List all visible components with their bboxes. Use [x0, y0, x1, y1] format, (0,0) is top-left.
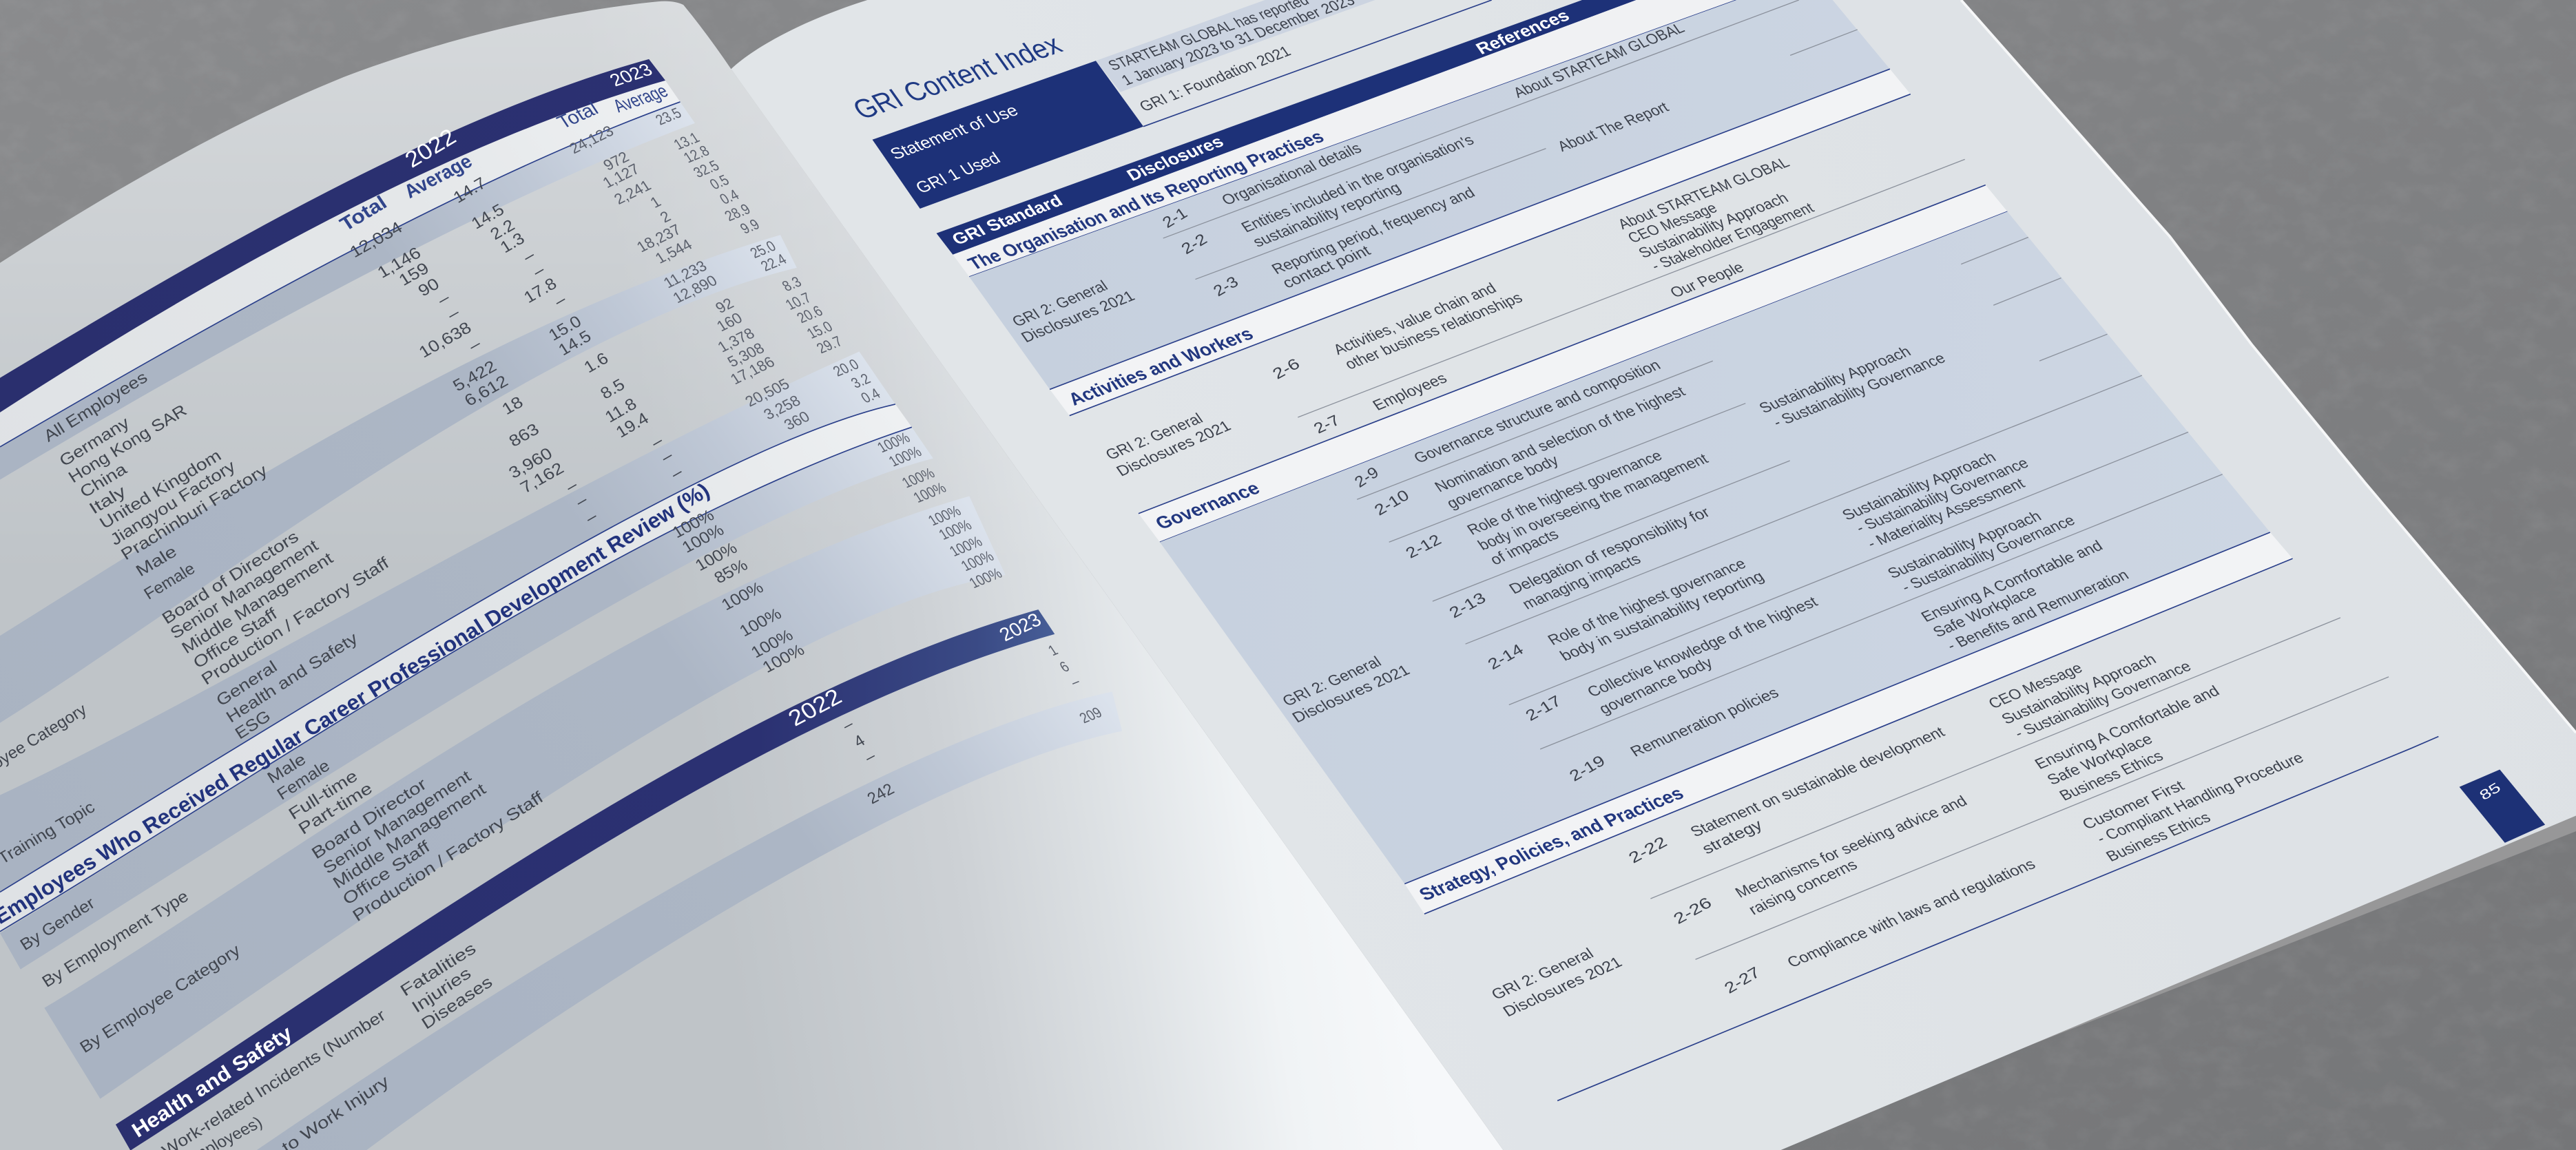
row labels: employee training hours: Senior Management [167, 535, 322, 642]
column: 2023 average [652, 105, 884, 406]
right page paper [731, 0, 2576, 1150]
column: 2022 average: – [582, 508, 601, 527]
references column: Sustainability Approach [1884, 508, 2044, 581]
column: 2022 total: – [444, 303, 464, 324]
column: 2022 review percentages: 85% [711, 556, 751, 587]
row labels [1279, 357, 1821, 785]
column: 2023 average: 10.7 [782, 290, 815, 313]
column: 2023 total: 20,505 [742, 375, 793, 410]
row labels: career development review: Female [273, 756, 333, 804]
row labels: Entities included in the organisation's [1238, 132, 1477, 236]
column: 2022 average: – [563, 476, 581, 496]
row labels: Delegation of responsibility for [1506, 504, 1713, 597]
row labels: body in overseeing the management [1475, 450, 1712, 553]
table rows: strategy, policies and practices: Sustainability Approach [1999, 651, 2159, 728]
column: 2022 average: 17.8 [521, 275, 560, 307]
column: 2023 average: 15.0 [804, 318, 836, 342]
table rows: strategy, policies and practices: Business Ethics [2057, 748, 2167, 804]
column: 2022 average: 11.8 [602, 395, 640, 426]
column: 2023 review percentages: 100% [936, 516, 975, 543]
column: 2022 total: 90 [415, 275, 443, 300]
column: 2023 review percentages: 100% [946, 533, 986, 560]
row labels: 2-17 [1522, 693, 1565, 724]
column: 2022 review percentages: 100% [718, 578, 767, 614]
column: 2023 total: 1 [647, 193, 664, 211]
row labels: career development review: Office Staff [340, 837, 433, 909]
row labels: employee training hours: Female [141, 560, 198, 603]
row labels: career development review: By Employee Category [76, 940, 244, 1056]
column: 2023 total: 360 [781, 408, 813, 433]
references column: - Materiality Assessment [1864, 475, 2028, 552]
row labels: career development review: Senior Management [320, 766, 475, 877]
table rows: strategy, policies and practices: 2-27 [1721, 964, 1764, 997]
white header band under 2022 and 2023 [0, 81, 680, 447]
column: 2022 total: 5,422 [450, 357, 500, 395]
column: 2023 average: 9.9 [737, 216, 763, 238]
column: 2022 review percentages: 100% [669, 506, 718, 542]
section band: activities and workers: Activities and Workers [1064, 324, 1258, 410]
row labels: career development review [17, 749, 547, 1056]
heading: employees who received regular career professional development review: Employees Who Received Regular Career Professional Development Review (%) [0, 479, 714, 929]
book page block edge [1763, 815, 2576, 1150]
column: 2023 review percentages: 100% [925, 503, 964, 529]
column: 2022 average: 19.4 [613, 410, 652, 441]
table rows: activities and workers: About STARTEAM GLOBAL [1614, 154, 1793, 232]
column: 2023 review percentages: 100% [966, 565, 1006, 592]
references column: Sustainability Approach [1756, 343, 1914, 416]
table rows: strategy, policies and practices: Business Ethics [2104, 810, 2214, 865]
table band: male and female rows [0, 235, 797, 723]
table rows: activities and workers: Sustainability Approach [1635, 189, 1791, 261]
column: 2022 total: 863 [506, 420, 542, 450]
page number tab: 85: 85 [2476, 780, 2504, 803]
row labels: sustainability reporting [1249, 179, 1404, 250]
table rows: strategy, policies and practices: CEO Message [1986, 660, 2086, 712]
row labels: 2-19 [1566, 753, 1608, 785]
column: 2022 average: 1.3 [497, 229, 528, 257]
column: 2023 average: 22.4 [758, 251, 790, 275]
column: 2022 total: 12,034 [346, 218, 406, 261]
panel: governance rows [1160, 211, 2270, 884]
row labels: body in sustainability reporting [1557, 569, 1767, 665]
column: 2022 average: 14.7 [450, 174, 490, 207]
row labels: 2-14 [1485, 641, 1527, 673]
row labels: employee training hours: Hong Kong SAR [65, 401, 190, 487]
column: 2022 average [450, 174, 686, 527]
table rows: strategy, policies and practices: Compliance with laws and regulations [1784, 857, 2039, 971]
row labels: 2-9 [1351, 463, 1382, 491]
statement of use block: GRI 1: Foundation 2021 [1136, 43, 1294, 114]
column: 2022 health and safety values [839, 715, 897, 807]
row labels: employee training hours [0, 368, 393, 868]
column: 2023 review percentages: 100% [874, 430, 913, 456]
column: 2023 total: 2,241 [611, 177, 654, 208]
right page white edge highlight [1961, 0, 2576, 733]
column: 2023 review percentages: 100% [911, 479, 949, 506]
column: 2023 average: 0.4 [716, 187, 742, 208]
row labels: Disclosures 2021 [1018, 288, 1138, 346]
column: 2023 review percentages [874, 430, 1006, 592]
column: 2023 health and safety values [1045, 642, 1105, 726]
column: 2023 review percentages: 100% [899, 465, 938, 492]
column: 2022 average: – [530, 261, 548, 281]
title: GRI Content Index [847, 30, 1068, 125]
left page top highlight [0, 1, 1101, 575]
row labels: About The Report [1554, 98, 1672, 154]
column: 2022 average: – [658, 447, 676, 467]
row labels: employee training hours: Office Staff [189, 604, 281, 672]
dark header band: health and safety [116, 609, 1055, 1150]
column: 2022 total: 7,162 [517, 459, 567, 497]
column headings: total and average [336, 81, 672, 236]
column: 2023 total: 5,308 [724, 339, 767, 370]
dark header band: 2022 and 2023 [0, 59, 665, 412]
column: 2023 review percentages: 100% [958, 548, 997, 574]
column: 2022 review percentages: 100% [748, 626, 796, 662]
column: 2023 average: 20.6 [794, 303, 826, 326]
table rows: activities and workers [1103, 154, 1965, 480]
references column: Safe Workplace [1930, 583, 2040, 640]
table rows: strategy, policies and practices: 2-26 [1670, 895, 1715, 928]
column: 2022 total: 3,960 [506, 444, 556, 482]
column: 2023 average: 0.4 [858, 386, 884, 406]
row labels: governance body [1444, 452, 1562, 512]
table header band: Disclosures [1123, 132, 1227, 185]
section band: strategy, policies and practices [1404, 532, 2293, 914]
column: 2022 health and safety values: – [861, 746, 880, 766]
references column: - Sustainability Governance [1852, 454, 2032, 536]
column: 2022 review percentages: 100% [736, 605, 785, 640]
column: 2023 average: 20.0 [830, 356, 862, 380]
table header band [937, 0, 1637, 255]
row labels: 2-1 [1159, 205, 1191, 231]
column: 2022 total: 10,638 [416, 319, 475, 362]
table rows: strategy, policies and practices: - Sustainability Governance [2011, 658, 2194, 741]
column: 2022 total: 6,612 [461, 372, 511, 410]
left page paper [0, 1, 1503, 1150]
row labels: Remuneration policies [1628, 685, 1783, 760]
column headings: total and average: Average [400, 150, 476, 202]
column: 2023 total: 24,123 [566, 123, 617, 157]
column: 2022 average: – [551, 291, 570, 311]
column: 2023 average: 25.0 [747, 238, 779, 262]
panel: right page GRI content index [731, 0, 2576, 1150]
column: 2023 average: 12.8 [681, 143, 713, 166]
row labels: Role of the highest governance [1464, 447, 1665, 538]
table rows: activities and workers: other business relationships [1342, 289, 1526, 373]
table header band: References [1472, 6, 1573, 58]
row labels: employee training hours: Italy [86, 483, 129, 518]
column: 2023 total: 3,258 [760, 392, 804, 423]
references column: Ensuring A Comfortable and [1918, 538, 2106, 625]
statement of use block [873, 0, 1492, 209]
row labels: career development review: Board Director [308, 774, 430, 863]
column: 2022 total: – [434, 289, 453, 309]
column: 2023 total: 1,544 [652, 236, 695, 267]
row labels: 2-13 [1446, 589, 1489, 622]
table header band: GRI Standard [948, 191, 1066, 249]
table rows: activities and workers: - Stakeholder Engagement [1648, 200, 1817, 274]
column: 2022 average: 8.5 [597, 376, 628, 403]
row labels [1009, 19, 1687, 346]
row labels: career development review: Production / Factory Staff [349, 787, 547, 925]
column: 2023 health and safety values: 1 [1045, 642, 1061, 659]
row labels: contact point [1280, 243, 1374, 292]
row labels: employee training hours: Germany [56, 413, 132, 470]
column: 2022 total: 18 [499, 393, 526, 419]
row labels: employee training hours: Prachinburi Factory [117, 461, 271, 564]
row labels: employee training hours: United Kingdom [96, 447, 225, 532]
table rows: strategy, policies and practices: 2-22 [1625, 834, 1670, 867]
table rows: strategy, policies and practices: Statement on sustainable development [1687, 724, 1949, 840]
column: 2022 average: 14.5 [555, 327, 594, 359]
health and safety heading: Health and Safety [127, 1021, 296, 1142]
references column [1756, 343, 2132, 654]
column: 2023 average: 0.5 [707, 172, 732, 193]
references column: - Sustainability Governance [1898, 512, 2079, 596]
table rows: activities and workers: Activities, value chain and [1330, 280, 1499, 357]
section band: governance: Governance [1152, 479, 1264, 534]
section band: governance [1139, 185, 2007, 542]
table rows: activities and workers: Our People [1667, 259, 1747, 301]
column: 2023 total [566, 123, 813, 433]
table rows: activities and workers: GRI 2: General [1103, 410, 1206, 463]
column: 2023 average: 32.5 [690, 158, 723, 181]
column: 2023 total: 92 [712, 295, 737, 317]
row labels: managing impacts [1519, 551, 1644, 613]
column: 2023 total: 12,890 [669, 272, 720, 306]
row labels: Role of the highest governance [1545, 556, 1749, 649]
column: 2022 average: 15.0 [546, 313, 585, 344]
table rows: activities and workers: CEO Message [1625, 200, 1721, 246]
year heading: lower 2022: 2022 [784, 684, 846, 731]
column: 2022 total: – [466, 335, 485, 355]
table rows: activities and workers: Disclosures 2021 [1114, 418, 1234, 480]
table band: training topic rows [0, 352, 895, 892]
page number tab: 85 [2460, 769, 2545, 843]
column: 2023 average: 8.3 [779, 273, 804, 295]
references column: Sustainability Approach [1839, 449, 1999, 524]
row labels: health and safety [158, 939, 496, 1150]
row labels: employee training hours: China [77, 460, 130, 501]
column: 2023 total: 2 [657, 208, 674, 226]
column: 2023 review percentages: 100% [886, 443, 925, 470]
column: 2022 average: 14.5 [468, 201, 508, 233]
table rows: strategy, policies and practices: strategy [1699, 817, 1766, 857]
column: 2022 average: – [648, 432, 667, 452]
row labels: About STARTEAM GLOBAL [1510, 19, 1687, 101]
table band: lost days rows [197, 691, 1122, 1150]
column: 2023 total: 1,378 [714, 324, 758, 355]
column: 2023 total: 1,127 [599, 160, 643, 191]
table rows: activities and workers: 2-7 [1310, 412, 1344, 437]
table rows: strategy, policies and practices: Customer First [2079, 777, 2188, 833]
column: 2022 review percentages: 100% [760, 641, 808, 676]
table rows: strategy, policies and practices: Disclosures 2021 [1499, 954, 1625, 1021]
row labels: Reporting period, frequency and [1268, 184, 1478, 277]
column: 2022 average: 2.2 [488, 216, 518, 244]
row labels: employee training hours: ESG [231, 707, 274, 743]
row labels: health and safety: Fatalities [397, 939, 479, 1000]
references column: - Sustainability Governance [1769, 350, 1949, 430]
row labels: employee training hours: Jiangyou Factory [107, 457, 238, 549]
column: 2022 health and safety values: 242 [864, 780, 897, 807]
row labels: 2-2 [1178, 231, 1210, 258]
statement of use block: GRI 1 Used [912, 149, 1004, 197]
column: 2023 health and safety values: 6 [1057, 658, 1072, 676]
section band: organisation and reporting practises: The Organisation and Its Reporting Practises [964, 127, 1328, 274]
row labels: Nomination and selection of the highest [1431, 383, 1688, 495]
row labels: Collective knowledge of the highest [1584, 594, 1821, 700]
table rows: strategy, policies and practices: Ensuring A Comfortable and [2032, 683, 2223, 773]
column: 2022 average: – [520, 246, 539, 266]
references column: - Benefits and Remuneration [1944, 567, 2132, 654]
table band: by gender rows [0, 427, 933, 970]
table rows: strategy, policies and practices: - Compliant Handling Procedure [2093, 750, 2307, 847]
table rows: activities and workers: 2-6 [1269, 355, 1303, 383]
column: 2022 total: 1,146 [374, 244, 424, 282]
column: 2023 health and safety values: – [1067, 673, 1083, 691]
column headings: total and average: Total [553, 98, 602, 133]
table band: all employees [0, 102, 695, 480]
column: 2023 total: 17,186 [727, 353, 778, 388]
row labels: GRI 2: General [1279, 654, 1384, 710]
column: 2023 average: 28.9 [722, 201, 754, 224]
year heading: lower 2023: 2023 [996, 609, 1046, 645]
row labels: health and safety: Injuries [408, 963, 475, 1016]
row labels: governance body [1596, 654, 1716, 718]
section band: activities and workers [1050, 69, 1911, 416]
table rows: activities and workers: Employees [1370, 370, 1451, 414]
column: 2022 health and safety values: – [839, 715, 858, 734]
column headings: total and average: Total [336, 191, 391, 236]
row labels: 2-12 [1402, 532, 1445, 562]
column: 2023 average: 3.2 [848, 370, 874, 392]
row labels: employee training hours: General [213, 657, 280, 710]
row labels: Disclosures 2021 [1289, 662, 1413, 726]
row labels: GRI 2: General [1009, 278, 1111, 331]
table rows: strategy, policies and practices: Mechanisms for seeking advice and [1732, 793, 1971, 901]
section band: organisation and reporting practises [953, 0, 1736, 277]
table rows: strategy, policies and practices [1488, 618, 2438, 1100]
row labels: career development review: By Employment Type [39, 886, 191, 991]
year heading: 2022: 2022 [400, 123, 461, 173]
section band: strategy, policies and practices: Strategy, Policies, and Practices [1415, 784, 1688, 905]
column: 2022 total [346, 218, 567, 497]
row labels: career development review: By Gender [17, 893, 98, 954]
row labels: employee training hours: All Employees [40, 368, 151, 446]
column: 2022 review percentages: 100% [692, 539, 740, 575]
column: 2023 total: 11,233 [661, 258, 710, 291]
column: 2022 health and safety values: 4 [850, 731, 868, 751]
row labels: employee training hours: Middle Management [178, 548, 337, 658]
column: 2023 total: 972 [600, 148, 632, 174]
row labels: employee training hours: Male [133, 543, 180, 581]
row labels: career development review: Full-time [285, 766, 361, 824]
column: 2023 total: 18,237 [634, 221, 684, 255]
table rows: strategy, policies and practices: Safe Workplace [2044, 731, 2156, 788]
column: 2023 health and safety values: 209 [1077, 704, 1105, 726]
row labels: Governance structure and composition [1411, 357, 1663, 466]
row labels: Organisational details [1218, 140, 1364, 208]
year heading: 2023: 2023 [606, 60, 656, 90]
column: 2022 average: – [668, 463, 686, 483]
column: 2022 review percentages: 100% [679, 521, 727, 556]
panel: left page [0, 1, 1503, 1150]
column: 2022 average: 1.6 [581, 349, 612, 377]
column: 2022 review percentages [669, 506, 808, 676]
panel: organisation rows [969, 0, 1890, 389]
table rows: strategy, policies and practices: GRI 2: General [1488, 945, 1597, 1003]
statement of use block: Statement of Use [887, 102, 1022, 163]
row labels: 2-3 [1210, 273, 1242, 300]
column: 2023 total: 160 [714, 309, 745, 335]
column: 2023 average: 29.7 [813, 333, 846, 357]
table band: by employee category rows [44, 496, 1006, 1099]
row labels: employee training hours: Board of Directors [158, 527, 302, 628]
column headings: total and average: Average [609, 81, 672, 116]
white heading band: career development review [0, 404, 912, 932]
column: 2023 average: 23.5 [652, 105, 685, 129]
row labels: employee training hours: Production / Factory Staff [198, 553, 393, 689]
column: 2022 average: – [572, 491, 591, 511]
row labels: of impacts [1487, 527, 1562, 569]
row labels: health and safety: Diseases [418, 972, 496, 1033]
row labels: career development review: Part-time [295, 778, 375, 838]
row labels: employee training hours: Health and Safety [222, 628, 362, 726]
column: 2023 average: 13.1 [671, 129, 703, 153]
row labels: career development review: Male [264, 749, 309, 787]
table rows: strategy, policies and practices: raising concerns [1745, 856, 1861, 919]
row labels: 2-10 [1371, 487, 1413, 519]
row labels: career development review: Middle Management [329, 779, 490, 892]
column: 2022 total: 159 [395, 259, 433, 289]
